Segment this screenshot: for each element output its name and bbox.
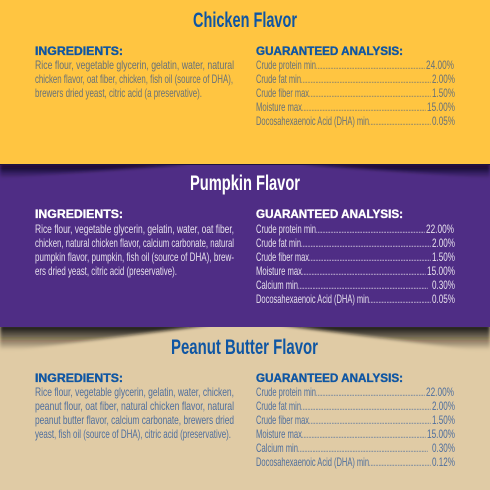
text block: pumpkin ingredients: chicken, natural chicken flavor, calcium carbonate, natural: [35, 236, 234, 250]
heading: guaranteed analysis: GUARANTEED ANALYSIS:: [256, 46, 403, 58]
table: pumpkin guaranteed analysis: Moisture max: [256, 264, 302, 278]
table: peanut butter guaranteed analysis: Crude fat min: [256, 399, 301, 413]
table: chicken guaranteed analysis: 0.05%: [432, 114, 455, 128]
table: peanut butter guaranteed analysis: 22.00%: [426, 385, 454, 399]
table: peanut butter guaranteed analysis: 15.00%: [427, 427, 455, 441]
text block: peanut butter ingredients: peanut flour, oat fiber, natural chicken flavor, natural: [35, 399, 234, 413]
text block: peanut butter ingredients: [35, 385, 234, 441]
text block: peanut butter ingredients: Rice flour, vegetable glycerin, gelatin, water, chicken,: [35, 385, 234, 399]
text block: peanut butter ingredients: yeast, fish oil (source of DHA), citric acid (preservative).: [35, 427, 231, 441]
table: pumpkin guaranteed analysis: Crude fat min: [256, 236, 301, 250]
table: pumpkin guaranteed analysis: 2.00%: [432, 236, 455, 250]
table: pumpkin guaranteed analysis: 22.00%: [426, 222, 454, 236]
heading: pumpkin flavor: Pumpkin Flavor: [190, 171, 300, 195]
table: peanut butter guaranteed analysis: [256, 385, 455, 469]
text block: pumpkin ingredients: ers dried yeast, citric acid (preservative).: [35, 264, 177, 278]
text block: pumpkin ingredients: Rice flour, vegetable glycerin, gelatin, water, oat fiber,: [35, 222, 234, 236]
table: chicken guaranteed analysis: 2.00%: [432, 72, 455, 86]
table: chicken guaranteed analysis: 1.50%: [432, 86, 455, 100]
table: pumpkin guaranteed analysis: Docosahexaenoic Acid (DHA) min: [256, 292, 369, 306]
table: chicken guaranteed analysis: Crude fiber max: [256, 86, 309, 100]
table: peanut butter guaranteed analysis: 1.50%: [432, 413, 455, 427]
heading: ingredients: INGREDIENTS:: [35, 209, 123, 221]
table: pumpkin guaranteed analysis: 1.50%: [432, 250, 455, 264]
table: chicken guaranteed analysis: Crude fat min: [256, 72, 301, 86]
table: chicken guaranteed analysis: Moisture max: [256, 100, 302, 114]
text block: chicken ingredients: chicken flavor, oat fiber, chicken, fish oil (source of DHA),: [35, 72, 233, 86]
table: chicken guaranteed analysis: Crude protein min: [256, 58, 316, 72]
text block: peanut butter ingredients: peanut butter flavor, calcium carbonate, brewers dried: [35, 413, 234, 427]
text block: pumpkin ingredients: pumpkin flavor, pumpkin, fish oil (source of DHA), brew-: [35, 250, 234, 264]
table: peanut butter guaranteed analysis: 2.00%: [432, 399, 455, 413]
table: pumpkin guaranteed analysis: Crude protein min: [256, 222, 316, 236]
table: pumpkin guaranteed analysis: 0.05%: [432, 292, 455, 306]
heading: ingredients: INGREDIENTS:: [35, 46, 123, 58]
text block: chicken ingredients: brewers dried yeast, citric acid (a preservative).: [35, 86, 202, 100]
table: peanut butter guaranteed analysis: Docosahexaenoic Acid (DHA) min: [256, 455, 369, 469]
table: chicken guaranteed analysis: 15.00%: [427, 100, 455, 114]
heading: guaranteed analysis: GUARANTEED ANALYSIS:: [256, 373, 403, 385]
text block: chicken ingredients: Rice flour, vegetable glycerin, gelatin, water, natural: [35, 58, 234, 72]
panel: peanut butter flavor: [0, 325, 490, 490]
table: pumpkin guaranteed analysis: 15.00%: [427, 264, 455, 278]
heading: ingredients: INGREDIENTS:: [35, 373, 123, 385]
table: peanut butter guaranteed analysis: 0.12%: [432, 455, 455, 469]
table: pumpkin guaranteed analysis: 0.30%: [432, 278, 455, 292]
heading: peanut butter flavor: Peanut Butter Flavor: [171, 335, 318, 359]
panel: pumpkin flavor: [0, 164, 490, 327]
table: peanut butter guaranteed analysis: Calcium min: [256, 441, 298, 455]
table: chicken guaranteed analysis: Docosahexaenoic Acid (DHA) min: [256, 114, 369, 128]
heading: guaranteed analysis: GUARANTEED ANALYSIS:: [256, 209, 403, 221]
table: pumpkin guaranteed analysis: Calcium min: [256, 278, 298, 292]
table: peanut butter guaranteed analysis: 0.30%: [432, 441, 455, 455]
table: pumpkin guaranteed analysis: Crude fiber max: [256, 250, 309, 264]
table: chicken guaranteed analysis: [256, 58, 455, 128]
table: peanut butter guaranteed analysis: Crude fiber max: [256, 413, 309, 427]
panel: chicken flavor: [0, 0, 490, 164]
table: peanut butter guaranteed analysis: Moisture max: [256, 427, 302, 441]
table: chicken guaranteed analysis: 24.00%: [426, 58, 454, 72]
table: peanut butter guaranteed analysis: Crude protein min: [256, 385, 316, 399]
table: pumpkin guaranteed analysis: [256, 222, 455, 306]
text block: pumpkin ingredients: [35, 222, 234, 278]
heading: chicken flavor: Chicken Flavor: [193, 8, 297, 32]
text block: chicken ingredients: [35, 58, 234, 100]
